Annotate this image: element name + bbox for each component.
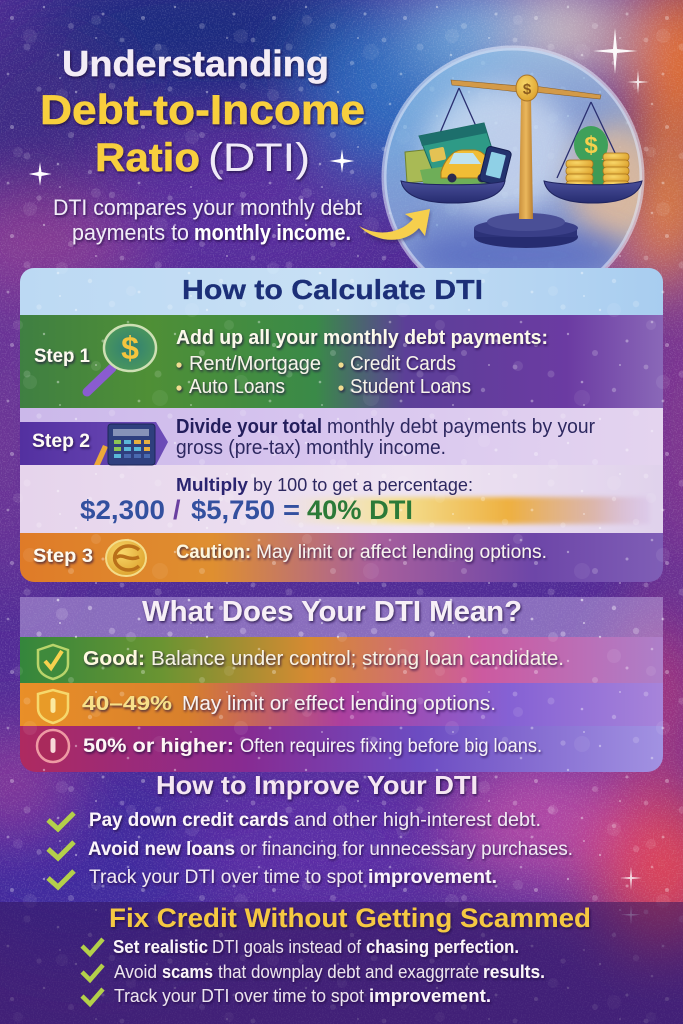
subtitle: DTI compares your monthly debt [53,195,362,220]
check list: results. [483,962,545,982]
50 text [83,736,542,757]
title: Debt-to-Income [40,86,365,133]
check list: chasing perfection. [366,937,519,957]
pivot coin: $ [523,81,532,98]
step 3 text: May limit or affect lending options. [256,542,547,563]
step 3 label: Step 3 [33,546,93,567]
arrow [359,209,430,240]
check list: and other high-interest debt. [294,809,541,831]
step 1 [34,325,548,398]
check list: Avoid new loans [88,838,235,860]
icon: magnifier with dollar [87,325,156,392]
heading: How to Calculate DTI [182,274,483,305]
left pan [401,181,505,203]
title [40,43,365,180]
check list: Track your DTI over time to spot [114,986,364,1006]
formula: $5,750 [191,495,275,525]
right pile: income: $ [584,132,598,159]
icon: red alert circle [37,730,69,762]
formula: / [173,495,181,525]
formula: $2,300 [80,495,165,525]
step 1 text: Auto Loans [189,376,285,398]
check list: or financing for unnecessary purchases. [240,838,573,860]
50 text: Often requires fixing before big loans. [240,736,542,757]
check list: improvement. [369,986,491,1006]
right pan [544,181,642,203]
check list: Pay down credit cards [89,809,289,831]
40-49 text: 40–49% [82,693,172,715]
step 2 [20,415,595,465]
step 3 text: Caution: [176,542,251,563]
multiply text: by 100 to get a percentage: [253,474,473,495]
step 3 [33,540,547,576]
step 1 text: Rent/Mortgage [189,353,321,375]
scale post [519,98,533,219]
icon: amber shield [38,690,68,723]
step 1 text: Credit Cards [350,353,456,375]
title: (DTI) [208,136,310,180]
title: Ratio [95,136,200,180]
step 1 text: Add up all your monthly debt payments: [176,326,548,349]
good text: Balance under control; strong loan candidate. [151,648,564,670]
step 2 text [176,415,595,459]
step 1 label: Step 1 [34,346,90,367]
sparkles [28,28,649,925]
section: how to improve [48,770,573,888]
check list: scams [162,962,213,982]
heading: How to Improve Your DTI [156,770,478,800]
step 1 text [176,326,548,398]
title: Understanding [62,43,329,84]
step 2 text: monthly debt payments by your [327,415,595,438]
check list [48,809,573,888]
50 text: 50% or higher: [83,736,234,757]
subtitle: monthly income. [194,220,351,245]
pivot coin [516,75,538,101]
multiply text: Multiply [176,474,249,495]
formula: 40% DTI [307,495,413,525]
scale strings [440,88,616,178]
check list: Set realistic [113,937,208,957]
formula [80,495,413,525]
panel: fix credit [0,902,683,1024]
step 2 text: gross (pre-tax) monthly income. [176,436,446,459]
multiply row [80,474,473,525]
check list: DTI goals instead of [212,937,362,957]
subtitle: payments to [72,220,189,245]
row: 50 or higher [37,730,542,762]
heading: Fix Credit Without Getting Scammed [109,903,591,933]
heading: What Does Your DTI Mean? [142,596,522,628]
step 2 text: Divide your total [176,415,322,438]
check list [82,937,545,1006]
icon: caution coin [106,540,146,576]
step 2 label: Step 2 [32,431,90,452]
icon: magnifier with dollar: $ [121,330,139,366]
row: good [38,645,564,679]
panel: what does your DTI mean [20,596,663,772]
icon: green shield check [38,645,68,679]
subtitle [53,195,362,245]
check list: Avoid [114,962,157,982]
icon: calculator [94,424,155,465]
formula: = [283,495,300,525]
left pile: debts [405,123,512,187]
good text: Good: [83,648,145,670]
step 2 banner [20,422,168,465]
row: 40-49 [38,690,496,723]
40-49 text: May limit or effect lending options. [182,693,496,715]
check list: that downplay debt and exaggrrate [218,962,479,982]
scale base [474,213,578,248]
icon: balance scale in circle [382,46,644,268]
scale beam [451,80,601,99]
check list: Track your DTI over time to spot [89,866,364,888]
panel: how to calculate [20,268,663,582]
step 1 text: Student Loans [350,376,471,398]
check list: improvement. [368,866,497,888]
right pile: income [566,126,629,189]
